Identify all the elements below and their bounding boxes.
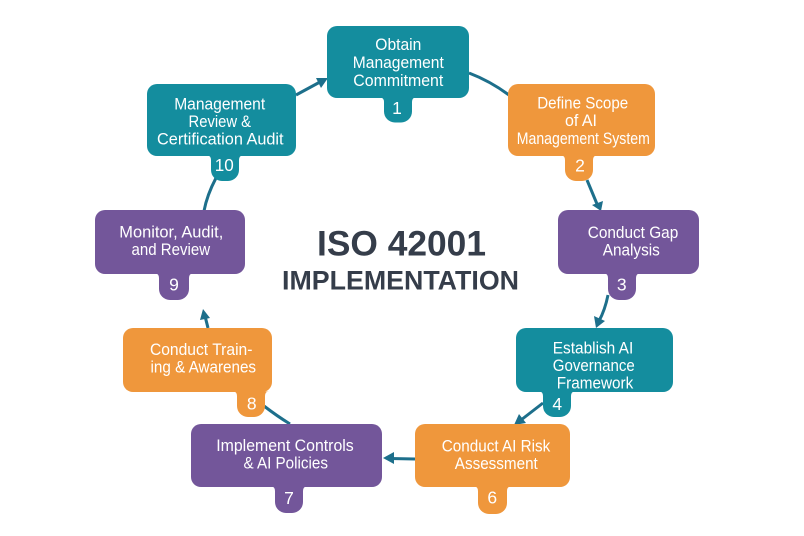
- arrow: step 10 to step 1: [296, 78, 328, 95]
- step 2: Define Scope of AI Management System: [508, 84, 655, 181]
- step 10: Management Review & Certification Audit: Review &: [189, 113, 251, 131]
- step 1: Obtain Management Commitment: [327, 26, 469, 122]
- arrow: step 1 to step 2: [469, 73, 509, 95]
- arrow: step 7 to step 8: [264, 406, 290, 424]
- arrow: step 4 to step 6: [514, 403, 543, 425]
- step 1: Obtain Management Commitment: 1: [392, 98, 402, 118]
- step 9: Monitor, Audit, and Review: [95, 210, 245, 300]
- step 4: Establish AI Governance Framework: Framework: [557, 375, 634, 393]
- step 9: Monitor, Audit, and Review: Monitor, Audit,: [119, 223, 223, 241]
- step 2: Define Scope of AI Management System: 2: [575, 156, 585, 176]
- title: ISO 42001: [317, 224, 486, 264]
- step 2: Define Scope of AI Management System: Management System: [517, 130, 650, 148]
- arrow: step 9 to step 10: [204, 178, 216, 211]
- step 2: Define Scope of AI Management System: of AI: [565, 112, 597, 130]
- step 7: Implement Controls & AI Policies: Implement Controls: [216, 437, 354, 455]
- step 6: Conduct AI Risk Assessment: Assessment: [455, 455, 538, 473]
- arrow: step 3 to step 4: [594, 295, 608, 328]
- step 7: Implement Controls & AI Policies: [191, 424, 382, 513]
- step 4: Establish AI Governance Framework: [516, 328, 673, 417]
- step 8: Conduct Training & Awareness: [123, 328, 272, 417]
- step 8: Conduct Training & Awareness: Conduct Train-: [150, 341, 252, 359]
- step 10: Management Review & Certification Audit: Management: [174, 95, 266, 113]
- step 3: Conduct Gap Analysis: Conduct Gap: [588, 224, 678, 242]
- step 7: Implement Controls & AI Policies: 7: [284, 488, 294, 508]
- step 3: Conduct Gap Analysis: 3: [617, 274, 627, 294]
- arrow: step 2 to step 3: [587, 180, 603, 211]
- arrow: step 6 to step 7: [383, 452, 415, 464]
- arrow: step 8 to step 9: [200, 309, 210, 328]
- step 1: Obtain Management Commitment: Obtain: [375, 36, 421, 54]
- step 6: Conduct AI Risk Assessment: [415, 424, 570, 514]
- title: IMPLEMENTATION: [282, 266, 519, 296]
- step 9: Monitor, Audit, and Review: and Review: [132, 241, 210, 259]
- step 6: Conduct AI Risk Assessment: Conduct AI Risk: [442, 438, 551, 456]
- step 2: Define Scope of AI Management System: Define Scope: [537, 94, 628, 112]
- step 10: Management Review & Certification Audit: 10: [215, 155, 234, 175]
- step 1: Obtain Management Commitment: Management: [353, 54, 444, 72]
- step 6: Conduct AI Risk Assessment: 6: [487, 487, 497, 507]
- step 8: Conduct Training & Awareness: ing & Awarenes: [151, 358, 256, 376]
- step 4: Establish AI Governance Framework: 4: [552, 394, 562, 414]
- step 4: Establish AI Governance Framework: Governance: [553, 357, 635, 375]
- step 10: Management Review & Certification Audit: [147, 84, 296, 181]
- step 4: Establish AI Governance Framework: Establish AI: [553, 339, 633, 357]
- step 3: Conduct Gap Analysis: Analysis: [603, 242, 660, 260]
- step 8: Conduct Training & Awareness: 8: [247, 393, 257, 413]
- step 9: Monitor, Audit, and Review: 9: [169, 275, 179, 295]
- step 10: Management Review & Certification Audit: Certification Audit: [157, 131, 284, 149]
- title: [282, 224, 519, 296]
- step 7: Implement Controls & AI Policies: & AI Policies: [243, 455, 328, 473]
- step 1: Obtain Management Commitment: Commitment: [353, 72, 444, 90]
- step 3: Conduct Gap Analysis: [558, 210, 699, 300]
